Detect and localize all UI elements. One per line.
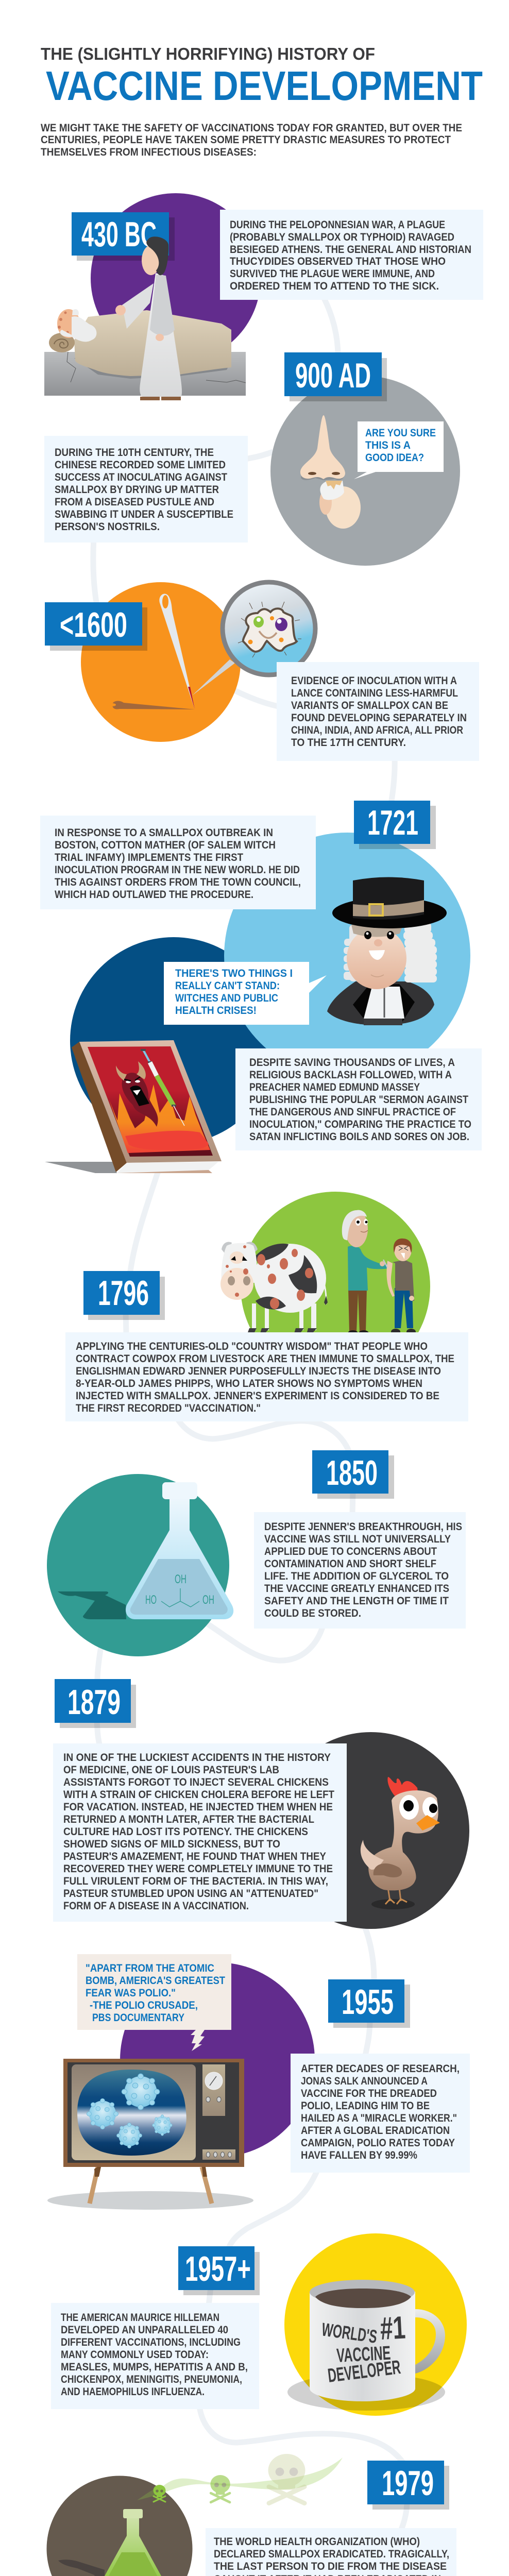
year label: 900 AD bbox=[284, 352, 387, 401]
text box: inoculation lance: EVIDENCE OF INOCULATION WITH A bbox=[291, 675, 457, 687]
text box: Hilleman: CHICKENPOX, MENINGITIS, PNEUMONIA, bbox=[61, 2374, 242, 2385]
year label: 1979 bbox=[367, 2461, 449, 2510]
text box: Hilleman bbox=[51, 2303, 259, 2409]
text box: Hilleman: AND HAEMOPHILUS INFLUENZA. bbox=[61, 2386, 205, 2398]
text box: Chinese inoculation: FROM A DISEASED PUSTULE AND bbox=[55, 496, 214, 508]
speech bubble: Mather: THERE'S TWO THINGS I bbox=[175, 968, 293, 979]
illustration: Edward Jenner bbox=[342, 1210, 389, 1336]
icon: glycerol flask bbox=[58, 1482, 233, 1619]
text box: inoculation lance: FOUND DEVELOPING SEPARATELY IN bbox=[291, 712, 467, 724]
text box: Pasteur: ASSISTANTS FORGOT TO INJECT SEVERAL CHICKENS bbox=[63, 1776, 329, 1788]
text box: inoculation lance: CHINA, INDIA, AND AFRICA, ALL PRIOR bbox=[291, 724, 463, 736]
panel: 430 BC bbox=[44, 193, 483, 400]
panel: 1721 bbox=[40, 801, 482, 1173]
text box: Pasteur: IN ONE OF THE LUCKIEST ACCIDENTS IN THE HISTORY bbox=[63, 1752, 331, 1764]
text box: Edward Jenner: ENGLISHMAN EDWARD JENNER PURPOSEFULLY INJECTS THE DISEASE INTO bbox=[76, 1365, 441, 1377]
speech bubble: GOOD IDEA? bbox=[365, 452, 424, 464]
icon: green flask bbox=[58, 2509, 162, 2576]
text box: plague of Athens: (PROBABLY SMALLPOX OR TYPHOID) RAVAGED bbox=[230, 231, 454, 243]
text box: Hilleman: DIFFERENT VACCINATIONS, INCLUDING bbox=[61, 2336, 241, 2348]
text box: Edward Jenner bbox=[65, 1332, 468, 1421]
mug lettering: WORLD'S bbox=[320, 2318, 379, 2347]
text box: Jonas Salk: HAILED AS A "MIRACLE WORKER." bbox=[301, 2112, 457, 2124]
text box: glycerol: LIFE. THE ADDITION OF GLYCEROL TO bbox=[264, 1570, 449, 1582]
year label: 900 AD: 900 AD bbox=[295, 356, 371, 395]
text box: Hilleman: THE AMERICAN MAURICE HILLEMAN bbox=[61, 2312, 219, 2324]
text box: religious backlash: SATAN INFLICTING BOILS AND SORES ON JOB. bbox=[249, 1131, 469, 1143]
text box: glycerol: THE VACCINE GREATLY ENHANCED ITS bbox=[264, 1583, 449, 1595]
callout: polio quote bbox=[77, 1954, 231, 2051]
illustration: diseased cow bbox=[220, 1242, 328, 1336]
text box: Pasteur bbox=[53, 1743, 347, 1922]
callout: polio quote: PBS DOCUMENTARY bbox=[92, 2012, 184, 2024]
text box: glycerol: VACCINE WAS STILL NOT UNIVERSALLY bbox=[264, 1533, 451, 1545]
text box: Pasteur: RETURNED A MONTH LATER, AFTER THE BACTERIAL bbox=[63, 1814, 314, 1825]
text box: religious backlash: DESPITE SAVING THOUSANDS OF LIVES, A bbox=[249, 1057, 455, 1069]
mug lettering: #1 bbox=[379, 2310, 406, 2347]
text box: plague of Athens: BESIEGED ATHENS. THE GENERAL AND HISTORIAN bbox=[230, 244, 471, 256]
speech bubble bbox=[354, 421, 444, 479]
text box: Chinese inoculation: CHINESE RECORDED SOME LIMITED bbox=[55, 459, 226, 471]
panel: before 1600 bbox=[45, 582, 479, 761]
panel: 1850 bbox=[47, 1450, 466, 1656]
text box: Pasteur: PASTEUR STUMBLED UPON USING AN "ATTENUATED" bbox=[63, 1888, 318, 1900]
year label: 1957+ bbox=[178, 2246, 260, 2295]
text box: Jonas Salk bbox=[291, 2054, 470, 2173]
year label: 1957+: 1957+ bbox=[185, 2249, 251, 2289]
callout: polio quote: -THE POLIO CRUSADE, bbox=[90, 1999, 198, 2011]
year label: 1796: 1796 bbox=[98, 1274, 149, 1313]
text box: Cotton Mather bbox=[40, 816, 316, 909]
mug lettering: VACCINE bbox=[336, 2343, 391, 2367]
molecule: glycerol: OH bbox=[202, 1593, 214, 1607]
icon: nose bbox=[300, 415, 345, 480]
text box: Pasteur: CULTURE HAD LOST ITS POTENCY. THE CHICKENS bbox=[63, 1826, 308, 1838]
year label: <1600: <1600 bbox=[60, 605, 127, 645]
text box: Edward Jenner: INJECTED WITH SMALLPOX. JENNER'S EXPERIMENT IS CONSIDERED TO BE bbox=[76, 1390, 439, 1402]
illustration: Cotton Mather bbox=[327, 877, 447, 1025]
text box: inoculation lance: LANCE CONTAINING LESS-HARMFUL bbox=[291, 687, 458, 699]
text box: Pasteur: WITH A STRAIN OF CHICKEN CHOLERA BEFORE HE LEFT bbox=[63, 1789, 334, 1801]
speech bubble: Mather: WITCHES AND PUBLIC bbox=[175, 992, 278, 1004]
mug lettering: DEVELOPER bbox=[327, 2357, 402, 2387]
icon: magnifier with germ bbox=[223, 582, 315, 675]
text box: Cotton Mather: WHICH HAD OUTLAWED THE PROCEDURE. bbox=[55, 889, 253, 901]
text box: Jonas Salk: HAVE FALLEN BY 99.99% bbox=[301, 2149, 417, 2161]
icon: fume with skulls bbox=[137, 2454, 343, 2503]
text box: Jonas Salk: JONAS SALK ANNOUNCED A bbox=[301, 2075, 428, 2087]
year label: 1955 bbox=[328, 1979, 410, 2028]
text box: glycerol: CONTAMINATION AND SHORT SHELF bbox=[264, 1558, 436, 1570]
title: THE (SLIGHTLY HORRIFYING) HISTORY OF bbox=[41, 44, 375, 63]
text box: Chinese inoculation: DURING THE 10TH CENTURY, THE bbox=[55, 447, 214, 459]
text box: inoculation lance: TO THE 17TH CENTURY. bbox=[291, 737, 406, 749]
text box: religious backlash: INOCULATION," COMPARING THE PRACTICE TO bbox=[249, 1118, 471, 1130]
year label: 1879 bbox=[55, 1679, 136, 1728]
icon: world's number one mug bbox=[287, 2280, 445, 2411]
text box: glycerol: DESPITE JENNER'S BREAKTHROUGH, HIS bbox=[264, 1521, 462, 1533]
intro text: WE MIGHT TAKE THE SAFETY OF VACCINATIONS TODAY FOR GRANTED, BUT OVER THE bbox=[41, 122, 462, 134]
text box: Pasteur: FORM OF A DISEASE IN A VACCINATION. bbox=[63, 1900, 249, 1912]
year label: 1850 bbox=[312, 1450, 394, 1499]
text box: Chinese inoculation bbox=[44, 436, 248, 543]
text box: religious backlash: RELIGIOUS BACKLASH FOLLOWED, WITH A bbox=[249, 1069, 452, 1081]
text box: Pasteur: RECOVERED THEY WERE COMPLETELY IMMUNE TO THE bbox=[63, 1863, 333, 1875]
text box: Hilleman: MANY COMMONLY USED TODAY: bbox=[61, 2349, 209, 2361]
text box: Cotton Mather: INOCULATION PROGRAM IN THE NEW WORLD. HE DID bbox=[55, 864, 300, 876]
molecule: glycerol: OH bbox=[175, 1572, 186, 1586]
panel: 900 AD bbox=[44, 352, 460, 566]
panel: 1957+ bbox=[51, 2233, 467, 2416]
text box: inoculation lance bbox=[277, 662, 479, 761]
molecule: glycerol: HO bbox=[145, 1593, 157, 1607]
text box: WHO eradication: DECLARED SMALLPOX ERADICATED. TRAGICALLY, bbox=[214, 2548, 449, 2560]
panel: 1979 bbox=[46, 2454, 456, 2576]
text box: plague of Athens: SURVIVED THE PLAGUE WERE IMMUNE, AND bbox=[230, 268, 435, 280]
speech bubble: Mather bbox=[164, 962, 327, 1025]
text box: WHO eradication bbox=[206, 2528, 456, 2576]
illustration: television with polio viruses bbox=[47, 2059, 253, 2210]
text box: Chinese inoculation: SMALLPOX BY DRYING UP MATTER bbox=[55, 484, 219, 496]
speech bubble: Mather: REALLY CAN'T STAND: bbox=[175, 980, 280, 992]
text box: plague of Athens: DURING THE PELOPONNESIAN WAR, A PLAGUE bbox=[230, 219, 445, 231]
text box: glycerol bbox=[254, 1512, 466, 1629]
intro text: CENTURIES, PEOPLE HAVE TAKEN SOME PRETTY DRASTIC MEASURES TO PROTECT bbox=[41, 134, 451, 146]
icon: finger with powder bbox=[319, 481, 361, 529]
text box: Hilleman: MEASLES, MUMPS, HEPATITIS A AND B, bbox=[61, 2361, 248, 2373]
text box: Cotton Mather: IN RESPONSE TO A SMALLPOX OUTBREAK IN bbox=[55, 827, 273, 839]
callout: polio quote: "APART FROM THE ATOMIC bbox=[86, 1962, 214, 1974]
text box: Jonas Salk: AFTER A GLOBAL ERADICATION bbox=[301, 2125, 450, 2137]
panel: 1955 bbox=[47, 1954, 470, 2210]
panel: 1796 bbox=[65, 1192, 468, 1421]
panel: 1879 bbox=[53, 1679, 469, 1929]
text box: Pasteur: SHOWED SIGNS OF MILD SICKNESS, BUT TO bbox=[63, 1838, 280, 1850]
text box: glycerol: APPLIED DUE TO CONCERNS ABOUT bbox=[264, 1546, 437, 1557]
text box: Chinese inoculation: SWABBING IT UNDER A SUSCEPTIBLE bbox=[55, 509, 233, 520]
text box: Hilleman: DEVELOPED AN UNPARALLELED 40 bbox=[61, 2324, 228, 2336]
text box: WHO eradication: THE LAST PERSON TO DIE FROM THE DISEASE bbox=[214, 2561, 447, 2572]
year label: 430 BC bbox=[72, 212, 175, 261]
text box: religious backlash: PREACHER NAMED EDMUND MASSEY bbox=[249, 1081, 420, 1093]
text box: religious backlash bbox=[235, 1048, 482, 1150]
text box: Pasteur: PASTEUR'S AMAZEMENT, HE FOUND THAT WHEN THEY bbox=[63, 1851, 326, 1862]
text box: Jonas Salk: POLIO, LEADING HIM TO BE bbox=[301, 2100, 430, 2112]
text box: Pasteur: FOR VACATION. INSTEAD, HE INJECTED THEM WHEN HE bbox=[63, 1801, 333, 1813]
year label: 1955: 1955 bbox=[342, 1982, 394, 2022]
text box: Pasteur: FULL VIRULENT FORM OF THE BACTERIA. IN THIS WAY, bbox=[63, 1875, 328, 1887]
text box: religious backlash: PUBLISHING THE POPULAR "SERMON AGAINST bbox=[249, 1094, 468, 1106]
text box: Cotton Mather: THIS AGAINST ORDERS FROM THE TOWN COUNCIL, bbox=[55, 876, 301, 888]
year label: <1600 bbox=[45, 602, 147, 651]
text box: Jonas Salk: CAMPAIGN, POLIO RATES TODAY bbox=[301, 2137, 455, 2149]
text box: plague of Athens: ORDERED THEM TO ATTEND TO THE SICK. bbox=[230, 280, 439, 292]
speech bubble: ARE YOU SURE bbox=[365, 427, 436, 439]
text box: glycerol: COULD BE STORED. bbox=[264, 1607, 361, 1619]
year label: 1850: 1850 bbox=[326, 1453, 378, 1493]
year label: 1721: 1721 bbox=[367, 803, 418, 842]
text box: Edward Jenner: THE FIRST RECORDED "VACCINATION." bbox=[76, 1402, 261, 1414]
year label: 1879: 1879 bbox=[67, 1683, 121, 1722]
speech bubble: THIS IS A bbox=[365, 439, 411, 451]
text box: glycerol: SAFETY AND THE LENGTH OF TIME IT bbox=[264, 1595, 449, 1607]
speech bubble: Mather: HEALTH CRISES! bbox=[175, 1005, 257, 1016]
callout: polio quote: BOMB, AMERICA'S GREATEST bbox=[86, 1975, 225, 1987]
text box: Chinese inoculation: SUCCESS AT INOCULATING AGAINST bbox=[55, 471, 227, 483]
timeline path bbox=[93, 296, 407, 2531]
year label: 1721 bbox=[354, 801, 436, 849]
intro text bbox=[41, 122, 462, 158]
intro text: THEMSELVES FROM INFECTIOUS DISEASES: bbox=[41, 146, 257, 158]
text box: plague of Athens bbox=[220, 210, 483, 300]
text box: religious backlash: THE DANGEROUS AND SINFUL PRACTICE OF bbox=[249, 1106, 456, 1118]
molecule: glycerol bbox=[145, 1572, 214, 1607]
text box: Pasteur: OF MEDICINE, ONE OF LOUIS PASTEUR'S LAB bbox=[63, 1764, 279, 1776]
title bbox=[41, 44, 483, 109]
text box: WHO eradication: THE WORLD HEALTH ORGANIZATION (WHO) bbox=[214, 2536, 420, 2548]
illustration: James Phipps bbox=[383, 1239, 416, 1335]
illustration: chicken bbox=[361, 1777, 440, 1909]
illustration: sermon book with devil bbox=[45, 1040, 222, 1173]
text box: inoculation lance: VARIANTS OF SMALLPOX CAN BE bbox=[291, 700, 448, 711]
text box: Edward Jenner: CONTRACT COWPOX FROM LIVESTOCK ARE THEN IMMUNE TO SMALLPOX, THE bbox=[76, 1353, 454, 1365]
year label: 430 BC: 430 BC bbox=[81, 215, 157, 254]
mug lettering bbox=[320, 2310, 406, 2387]
year label: 1796 bbox=[83, 1271, 165, 1320]
text box: Cotton Mather: BOSTON, COTTON MATHER (OF SALEM WITCH bbox=[55, 839, 276, 851]
text box: plague of Athens: THUCYDIDES OBSERVED THAT THOSE WHO bbox=[230, 256, 446, 267]
text box: Jonas Salk: VACCINE FOR THE DREADED bbox=[301, 2088, 437, 2099]
callout: polio quote: FEAR WAS POLIO." bbox=[86, 1987, 176, 1999]
icon: needle bbox=[109, 594, 235, 709]
year label: 1979: 1979 bbox=[382, 2464, 434, 2503]
illustration: Thucydides and sick patient bbox=[44, 236, 246, 400]
text box: Jonas Salk: AFTER DECADES OF RESEARCH, bbox=[301, 2063, 460, 2075]
text box: Edward Jenner: 8-YEAR-OLD JAMES PHIPPS, WHO LATER SHOWS NO SYMPTOMS WHEN bbox=[76, 1378, 422, 1389]
text box: Chinese inoculation: PERSON'S NOSTRILS. bbox=[55, 521, 160, 533]
text box: Edward Jenner: APPLYING THE CENTURIES-OLD "COUNTRY WISDOM" THAT PEOPLE WHO bbox=[76, 1341, 428, 1352]
text box: Cotton Mather: TRIAL INFAMY) IMPLEMENTS THE FIRST bbox=[55, 852, 243, 863]
